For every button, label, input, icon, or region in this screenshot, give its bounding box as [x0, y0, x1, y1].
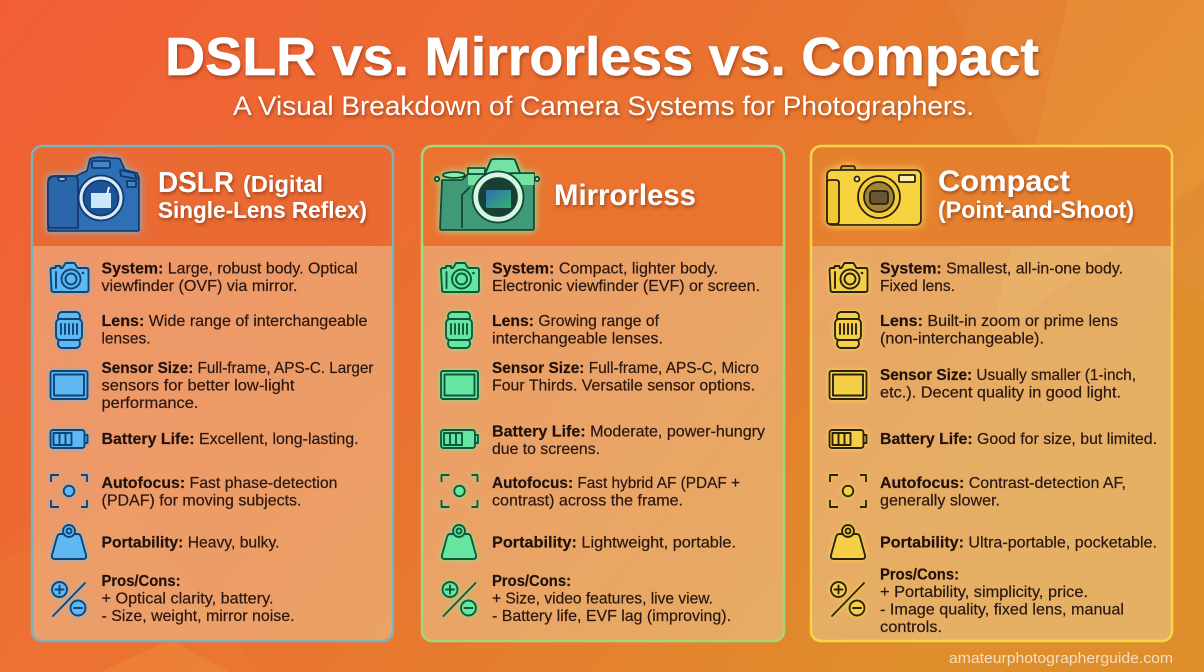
heading: DSLR: (Digital [243, 171, 323, 197]
icon: battery [830, 430, 866, 448]
text: pros and cons: - Battery life, EVF lag (improving). [492, 608, 731, 625]
icon: autofocus [51, 475, 87, 507]
text: lens [102, 313, 368, 348]
icon: DSLR camera [48, 157, 139, 231]
row: autofocus [442, 475, 740, 510]
text: sensor [492, 360, 759, 394]
icon: compact camera [827, 166, 921, 225]
text: pros and cons: Pros/Cons: [492, 573, 571, 590]
text: autofocus: Autofocus: Fast phase-detection [102, 475, 338, 492]
text: sensor: etc.). Decent quality in good light. [880, 384, 1121, 402]
icon: lens [835, 312, 861, 348]
text: autofocus: contrast) across the frame. [492, 492, 683, 510]
heading: Compact: Compact [938, 165, 1070, 198]
text: system: System: Compact, lighter body. [492, 260, 718, 278]
text: lens: (non-interchangeable). [880, 330, 1044, 348]
row: sensor [441, 360, 759, 399]
text: battery: Battery Life: Excellent, long-lasting. [102, 431, 358, 448]
icon: sensor [441, 371, 478, 399]
panel header: Mirrorless [422, 146, 784, 246]
row: pros and cons [442, 573, 731, 625]
text: system [880, 260, 1123, 295]
icon: pros and cons [831, 582, 864, 616]
text: autofocus: (PDAF) for moving subjects. [102, 492, 302, 510]
row: sensor [830, 367, 1136, 402]
text: lens [492, 313, 663, 348]
text: pros and cons [102, 573, 294, 625]
text: system: System: Smallest, all-in-one body. [880, 260, 1123, 278]
icon: camera [830, 263, 868, 292]
text: sensor [102, 360, 374, 412]
icon: battery [50, 430, 88, 448]
text: sensor: Sensor Size: Full-frame, APS-C, Micro [492, 360, 759, 377]
heading: DSLR: Single-Lens Reflex) [158, 197, 367, 223]
heading: Compact: (Point-and-Shoot) [938, 197, 1134, 224]
text: autofocus: generally slower. [880, 492, 1000, 510]
row: battery [441, 424, 765, 458]
row: battery [830, 430, 1157, 448]
text: battery: Battery Life: Good for size, but limited. [880, 431, 1157, 448]
icon: sensor [830, 371, 866, 399]
row: sensor [50, 360, 374, 412]
row: lens [835, 312, 1118, 348]
text: pros and cons: - Size, weight, mirror noise. [102, 608, 294, 625]
panel: Compact [811, 146, 1172, 641]
icon: battery [441, 430, 478, 448]
text: battery: due to screens. [492, 441, 600, 458]
text: pros and cons: + Size, video features, live view. [492, 590, 713, 608]
row: autofocus [51, 475, 338, 510]
text: pros and cons: Pros/Cons: [102, 573, 180, 590]
row: lens [56, 312, 368, 348]
text: pros and cons: Pros/Cons: [880, 566, 959, 584]
text: autofocus [492, 475, 740, 510]
icon: pros and cons [442, 582, 476, 616]
row: lens [446, 312, 663, 348]
heading: DSLR [158, 167, 367, 223]
text: system: Fixed lens. [880, 278, 955, 295]
icon: pros and cons [52, 582, 86, 616]
footer: website: amateurphotographerguide.com [949, 650, 1173, 667]
text: portability: Portability: Lightweight, portable. [492, 534, 736, 552]
row: portability [52, 525, 279, 559]
text: pros and cons: - Image quality, fixed lens, manual [880, 602, 1124, 618]
text: autofocus: Autofocus: Contrast-detection AF, [880, 475, 1126, 492]
text: system [492, 260, 760, 295]
row: autofocus [830, 475, 1126, 510]
panel: DSLR [32, 146, 393, 641]
icon: sensor [50, 371, 88, 399]
text: battery: Battery Life: Moderate, power-hungry [492, 424, 765, 440]
icon: lens [56, 312, 82, 348]
text: lens: interchangeable lenses. [492, 330, 663, 348]
text: lens: lenses. [102, 330, 150, 348]
text: sensor: Four Thirds. Versatile sensor options. [492, 378, 755, 394]
icon: camera [50, 263, 88, 292]
text: autofocus: Autofocus: Fast hybrid AF (PDAF + [492, 475, 740, 492]
text: autofocus [880, 475, 1126, 510]
text: sensor [880, 367, 1136, 402]
icon: weight [442, 525, 476, 559]
text: pros and cons: + Portability, simplicity, price. [880, 584, 1088, 601]
text: pros and cons: + Optical clarity, battery. [102, 590, 274, 608]
subtitle: A Visual Breakdown of Camera Systems for Photographers. [233, 91, 974, 121]
row: system [830, 260, 1123, 295]
text: portability: Portability: Heavy, bulky. [102, 534, 280, 552]
heading: DSLR: DSLR [158, 167, 234, 199]
heading: Compact [938, 165, 1134, 224]
text: lens: Lens: Growing range of [492, 313, 660, 330]
text: system: System: Large, robust body. Optical [102, 260, 358, 278]
row: portability [442, 525, 736, 559]
row: system [441, 260, 760, 295]
text: pros and cons: controls. [880, 619, 942, 636]
title: DSLR vs. Mirrorless vs. Compact [165, 27, 1039, 87]
text: lens [880, 313, 1118, 348]
text: sensor: Sensor Size: Full-frame, APS-C. Larger [102, 360, 374, 377]
icon: weight [831, 525, 865, 559]
panel: Mirrorless [422, 146, 784, 641]
text: autofocus [102, 475, 338, 510]
panel header: DSLR [32, 146, 393, 246]
text: sensor: performance. [102, 395, 198, 412]
row: battery [50, 430, 358, 448]
text: system: Electronic viewfinder (EVF) or screen. [492, 278, 760, 295]
text: battery [492, 424, 765, 458]
row: pros and cons [52, 573, 294, 625]
icon: lens [446, 312, 472, 348]
text: sensor: Sensor Size: Usually smaller (1-inch, [880, 367, 1136, 384]
icon: mirrorless camera [435, 159, 539, 230]
text: pros and cons [880, 566, 1124, 636]
icon: weight [52, 525, 86, 559]
row: pros and cons [831, 566, 1124, 636]
text: system [102, 260, 358, 295]
text: system: viewfinder (OVF) via mirror. [102, 278, 298, 295]
icon: autofocus [442, 475, 478, 507]
icon: autofocus [830, 475, 866, 507]
row: portability [831, 525, 1157, 559]
text: lens: Lens: Built-in zoom or prime lens [880, 313, 1118, 330]
row: system [50, 260, 358, 295]
text: lens: Lens: Wide range of interchangeable [102, 313, 368, 330]
panel header: Compact [811, 146, 1172, 246]
text: sensor: sensors for better low-light [102, 378, 295, 394]
text: portability: Portability: Ultra-portable, pocketable. [880, 534, 1157, 552]
icon: camera [441, 263, 479, 292]
heading: Mirrorless: Mirrorless [554, 179, 696, 212]
text: pros and cons [492, 573, 731, 625]
